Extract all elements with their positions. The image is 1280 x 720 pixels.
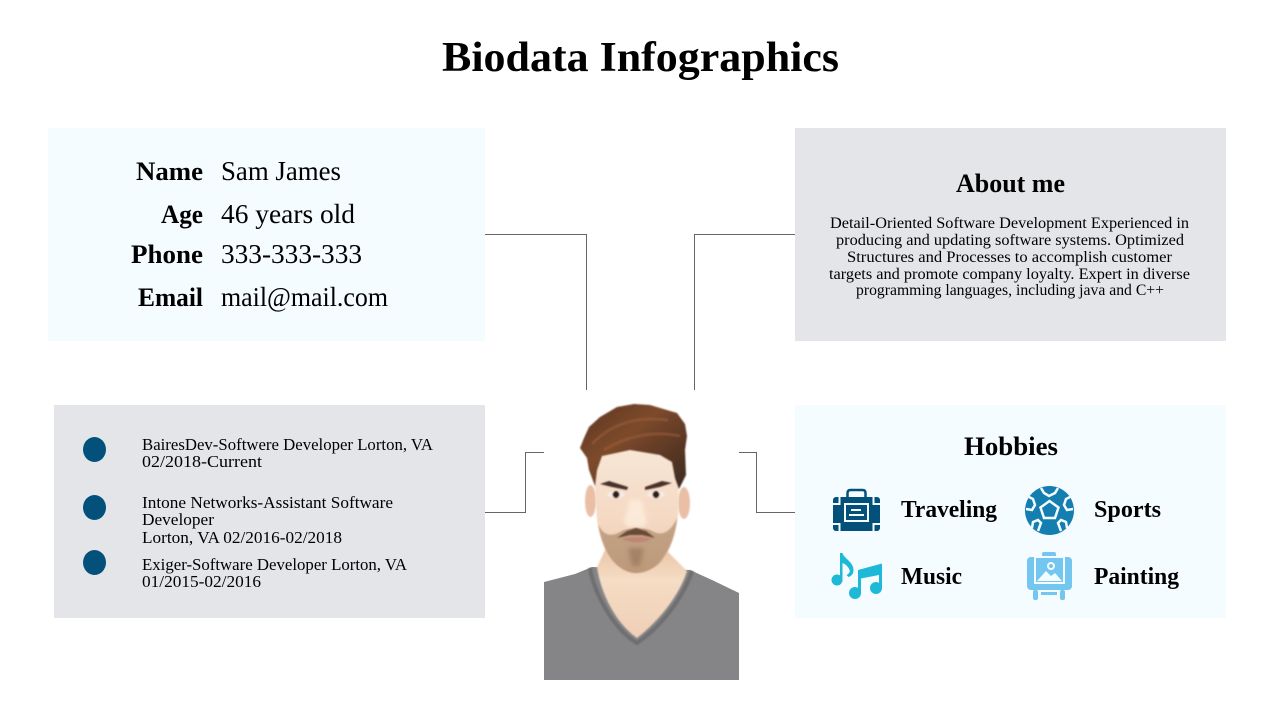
about me text: producing and updating software systems. Optimized xyxy=(836,232,1184,249)
panel: about me xyxy=(795,128,1226,341)
beard stubble xyxy=(598,518,677,573)
about me heading: About me xyxy=(956,169,1065,198)
job 3 text xyxy=(142,555,408,591)
panel: hobbies xyxy=(795,405,1226,618)
photo: man portrait xyxy=(544,404,739,680)
job 3 text: 01/2015-02/2016 xyxy=(142,572,261,591)
age row: Age xyxy=(161,200,203,229)
job 3 text: Exiger-Software Developer Lorton, VA xyxy=(142,555,408,574)
age row xyxy=(161,199,356,229)
email row: Email xyxy=(138,283,203,312)
job 2 text: Developer xyxy=(142,510,214,529)
phone row xyxy=(131,239,362,269)
about me text: programming languages, including java and C++ xyxy=(856,282,1164,299)
email row: mail@mail.com xyxy=(221,282,388,312)
about me text: targets and promote company loyalty. Expert in diverse xyxy=(829,266,1190,283)
age row: 46 years old xyxy=(221,199,356,229)
eyebrows xyxy=(600,481,672,490)
job 1 text: 02/2018-Current xyxy=(142,452,262,471)
connector: about me to photo xyxy=(694,234,795,390)
job 1 text: BairesDev-Softwere Developer Lorton, VA xyxy=(142,435,434,454)
mustache xyxy=(617,528,655,538)
label: music: Music xyxy=(901,564,962,590)
about me text: Detail-Oriented Software Development Experienced in xyxy=(830,215,1189,232)
name row: Name xyxy=(136,157,203,186)
job 1 text xyxy=(142,435,434,471)
connector: hobbies to photo xyxy=(739,452,795,512)
icon: music notes xyxy=(832,553,882,599)
bullet: job 1 xyxy=(83,437,106,462)
icon: suitcase xyxy=(832,490,880,531)
name row xyxy=(136,156,341,186)
label: traveling: Traveling xyxy=(901,497,997,523)
nose xyxy=(624,500,647,527)
hair xyxy=(580,404,687,489)
hobbies heading: Hobbies xyxy=(964,432,1058,461)
job 2 text: Intone Networks-Assistant Software xyxy=(142,493,393,512)
about me text: Structures and Processes to accomplish customer xyxy=(847,249,1173,266)
bullet: job 2 xyxy=(83,495,106,520)
email row xyxy=(138,282,388,312)
icon: soccer ball xyxy=(1025,486,1074,535)
job 2 text: Lorton, VA 02/2016-02/2018 xyxy=(142,528,342,547)
shirt collar xyxy=(590,568,692,643)
panel: personal details xyxy=(48,128,485,341)
connector: personal details to photo xyxy=(485,234,586,390)
phone row: Phone xyxy=(131,240,203,269)
eyes xyxy=(608,491,664,498)
about me text xyxy=(829,215,1190,299)
ears xyxy=(585,485,690,519)
icon: painting easel xyxy=(1027,552,1072,600)
connector: experience to photo xyxy=(485,452,544,512)
name row: Sam James xyxy=(221,156,341,186)
face xyxy=(594,448,679,573)
label: painting: Painting xyxy=(1094,564,1179,590)
hair highlights xyxy=(592,419,680,450)
label: sports: Sports xyxy=(1094,497,1161,523)
phone row: 333-333-333 xyxy=(221,239,362,269)
neck and chest xyxy=(597,548,687,638)
mouth xyxy=(622,537,652,542)
title: Biodata Infographics xyxy=(442,35,839,81)
shirt xyxy=(544,567,739,680)
bullet: job 3 xyxy=(83,550,106,575)
chin goatee xyxy=(628,548,644,566)
panel: work experience xyxy=(54,405,485,618)
job 2 text xyxy=(142,493,393,547)
